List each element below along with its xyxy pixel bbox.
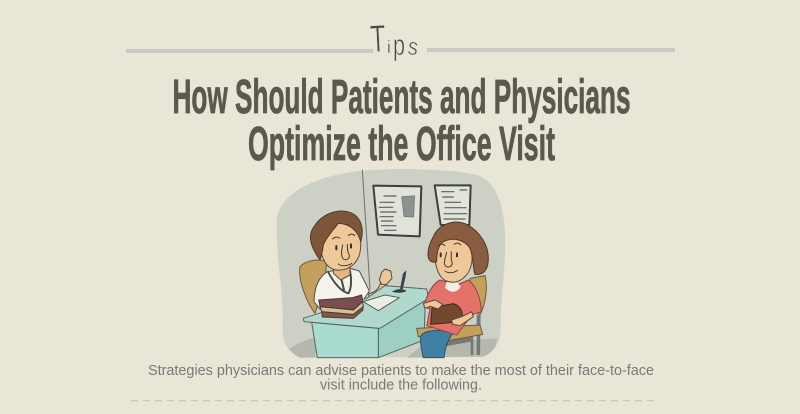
doctor neck and head [333,263,350,280]
stethoscope [328,271,351,293]
intro paragraph: Strategies physicians can advise patients to make the most of their face-to-face [148,363,654,379]
tips label: i [386,38,391,58]
book stack [319,295,363,318]
patient chair [417,276,486,355]
desk side [378,300,425,358]
doctor face [333,234,355,266]
floor [289,337,497,358]
doctor arm [368,282,387,299]
patient hands [423,300,473,326]
tips label [369,17,420,62]
wall backdrop [277,169,505,358]
patient eyes [441,253,457,256]
doctor chair [300,260,327,313]
intro paragraph: visit include the following. [320,378,482,394]
desk top [303,286,429,328]
tips label: T [369,17,387,60]
doctor hand [379,269,392,284]
patient blouse [424,280,481,335]
left framed poster [373,186,421,236]
wall divider [362,170,370,289]
patient head [435,235,472,282]
doctor hair [310,211,362,260]
title: Optimize the Office Visit [248,117,555,171]
paper [363,295,399,311]
handbag [431,304,462,324]
intro paragraph [148,363,654,394]
illustration: doctor and patient at a desk [277,169,505,358]
doctor shirt [314,268,369,309]
patient neckline [445,282,461,292]
doctor eyes [336,244,351,249]
patient hair [428,222,488,275]
pen stand [392,270,407,293]
right framed poster [435,185,471,225]
header rule: left [126,49,373,53]
tips label: p [393,27,405,62]
desk front [312,322,378,358]
tips label: s [406,33,420,61]
patient face [438,243,461,273]
header rule: right [427,48,675,52]
patient jeans [421,330,453,358]
title [172,70,630,171]
